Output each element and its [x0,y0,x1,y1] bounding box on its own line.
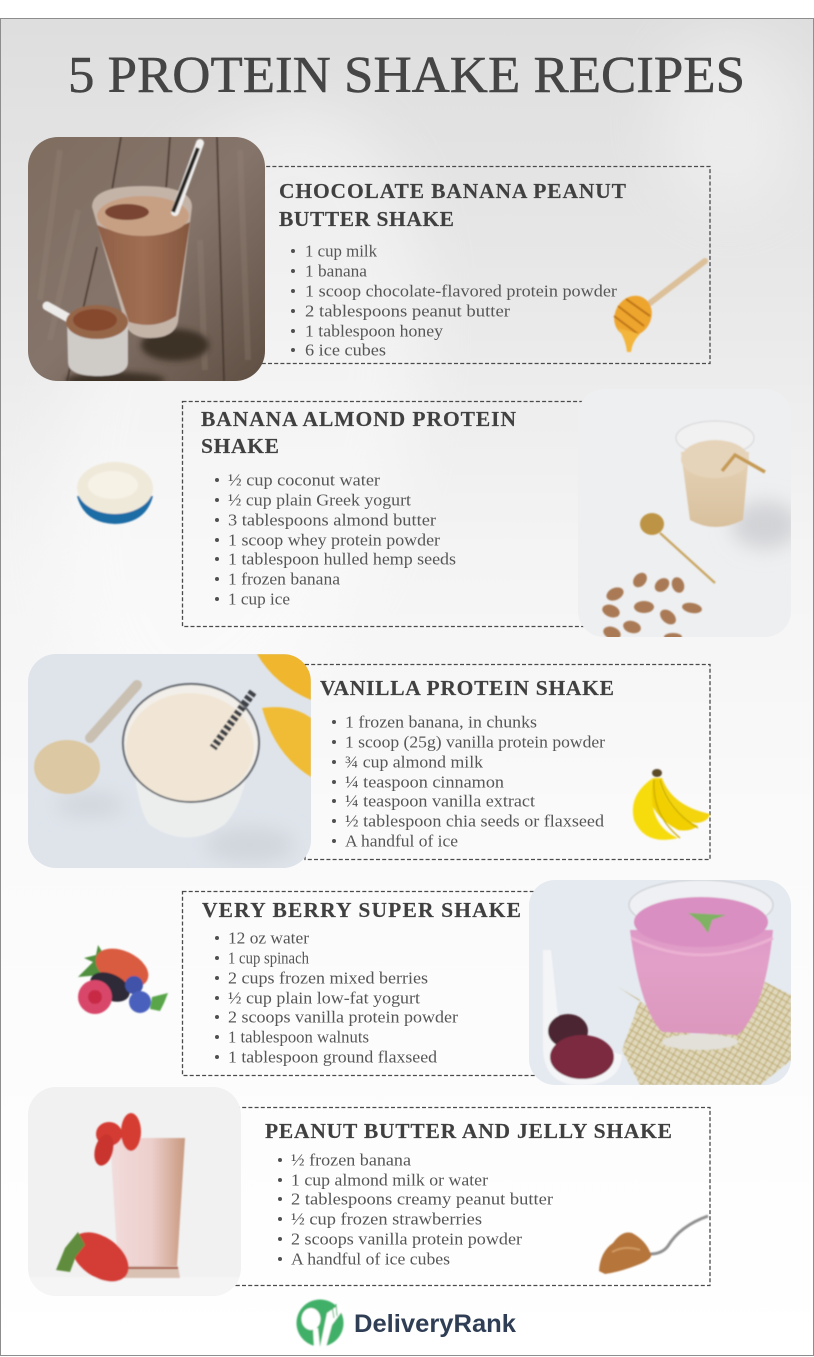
photo: vanilla shake [28,654,311,868]
photo: chocolate shake [28,137,265,388]
ingredient list: 2 tablespoons creamy peanut butter [291,1190,554,1208]
ingredient list: ¾ cup almond milk [345,752,484,772]
ingredient list: 1 cup milk [305,242,378,260]
ingredient list: 1 frozen banana [228,570,341,588]
ingredient list: ¼ teaspoon vanilla extract [345,792,535,810]
ingredient list: 1 scoop whey protein powder [228,530,441,550]
panel: banana almond protein shake: SHAKE [201,434,279,458]
recipe box 4 [182,892,542,1076]
ingredient list: 1 scoop chocolate-flavored protein powder [305,282,618,300]
panel: chocolate banana peanut butter shake [28,137,710,388]
ingredient list: 1 tablespoon honey [305,322,444,340]
wordmark: DeliveryRank [354,1310,516,1338]
ingredient list [215,470,456,608]
ingredient list: 1 tablespoon hulled hemp seeds [228,550,456,568]
ingredient list: 2 scoops vanilla protein powder [228,1008,459,1026]
ingredient list: 1 banana [305,262,368,280]
ingredient list: 1 tablespoon walnuts [228,1028,369,1046]
ingredient list: 2 scoops vanilla protein powder [291,1230,523,1248]
icon: bananas [633,769,710,840]
recipe box 5 [236,1108,710,1286]
ingredient list: 12 oz water [228,928,310,948]
ingredient list: 2 cups frozen mixed berries [228,968,428,988]
ingredient list: 6 ice cubes [305,340,386,360]
heading: VANILLA PROTEIN SHAKE [320,676,614,700]
ingredient list: 1 cup spinach [228,948,310,968]
heading: CHOCOLATE BANANA PEANUT [279,179,627,203]
icon: yogurt bowl [77,462,153,524]
ingredient list: A handful of ice [345,832,458,850]
photo: strawberry shake [28,1087,241,1296]
panel: banana almond protein shake [77,389,799,642]
ingredient list: 2 tablespoons peanut butter [305,302,511,320]
icon: honey dipper [607,261,705,352]
ingredient list: ½ frozen banana [291,1150,412,1170]
ingredient list: 1 frozen banana, in chunks [345,712,537,732]
ingredient list: 1 scoop (25g) vanilla protein powder [345,732,606,752]
ingredient list: 1 tablespoon ground flaxseed [228,1048,438,1066]
ingredient list [291,242,618,360]
recipe box 1 [260,166,710,364]
icon: peanut butter spoon [599,1216,708,1274]
heading: PEANUT BUTTER AND JELLY SHAKE [265,1119,672,1143]
ingredient list [215,928,459,1066]
ingredient list: ½ cup frozen strawberries [291,1210,482,1228]
ingredient list: ¼ teaspoon cinnamon [345,772,504,792]
heading: VERY BERRY SUPER SHAKE [202,898,521,922]
photo: berry shake [529,880,791,1085]
ingredient list: ½ cup plain low-fat yogurt [228,988,420,1008]
ingredient list [278,1150,554,1268]
ingredient list: ½ cup plain Greek yogurt [228,490,411,510]
ingredient list [332,712,606,850]
ingredient list: 1 cup ice [228,590,290,608]
ingredient list: 1 cup almond milk or water [291,1170,489,1190]
ingredient list: A handful of ice cubes [291,1250,450,1268]
panel: very berry super shake [78,880,791,1085]
icon: berries [78,941,168,1014]
title: 5 PROTEIN SHAKE RECIPES [68,47,745,104]
ingredient list: ½ cup coconut water [228,470,381,490]
panel: vanilla protein shake [28,654,710,868]
ingredient list: ½ tablespoon chia seeds or flaxseed [345,812,605,830]
logo: DeliveryRank [296,1300,516,1347]
panel: chocolate banana peanut butter shake: BUTTER SHAKE [279,207,454,231]
recipe box 3 [305,664,710,860]
heading: BANANA ALMOND PROTEIN [201,407,516,431]
icon: green spoon and fork badge [296,1300,344,1347]
recipe box 2 [182,402,588,626]
ingredient list: 3 tablespoons almond butter [228,510,437,530]
photo: almond shake [581,400,791,637]
panel: peanut butter and jelly shake [28,1087,710,1296]
